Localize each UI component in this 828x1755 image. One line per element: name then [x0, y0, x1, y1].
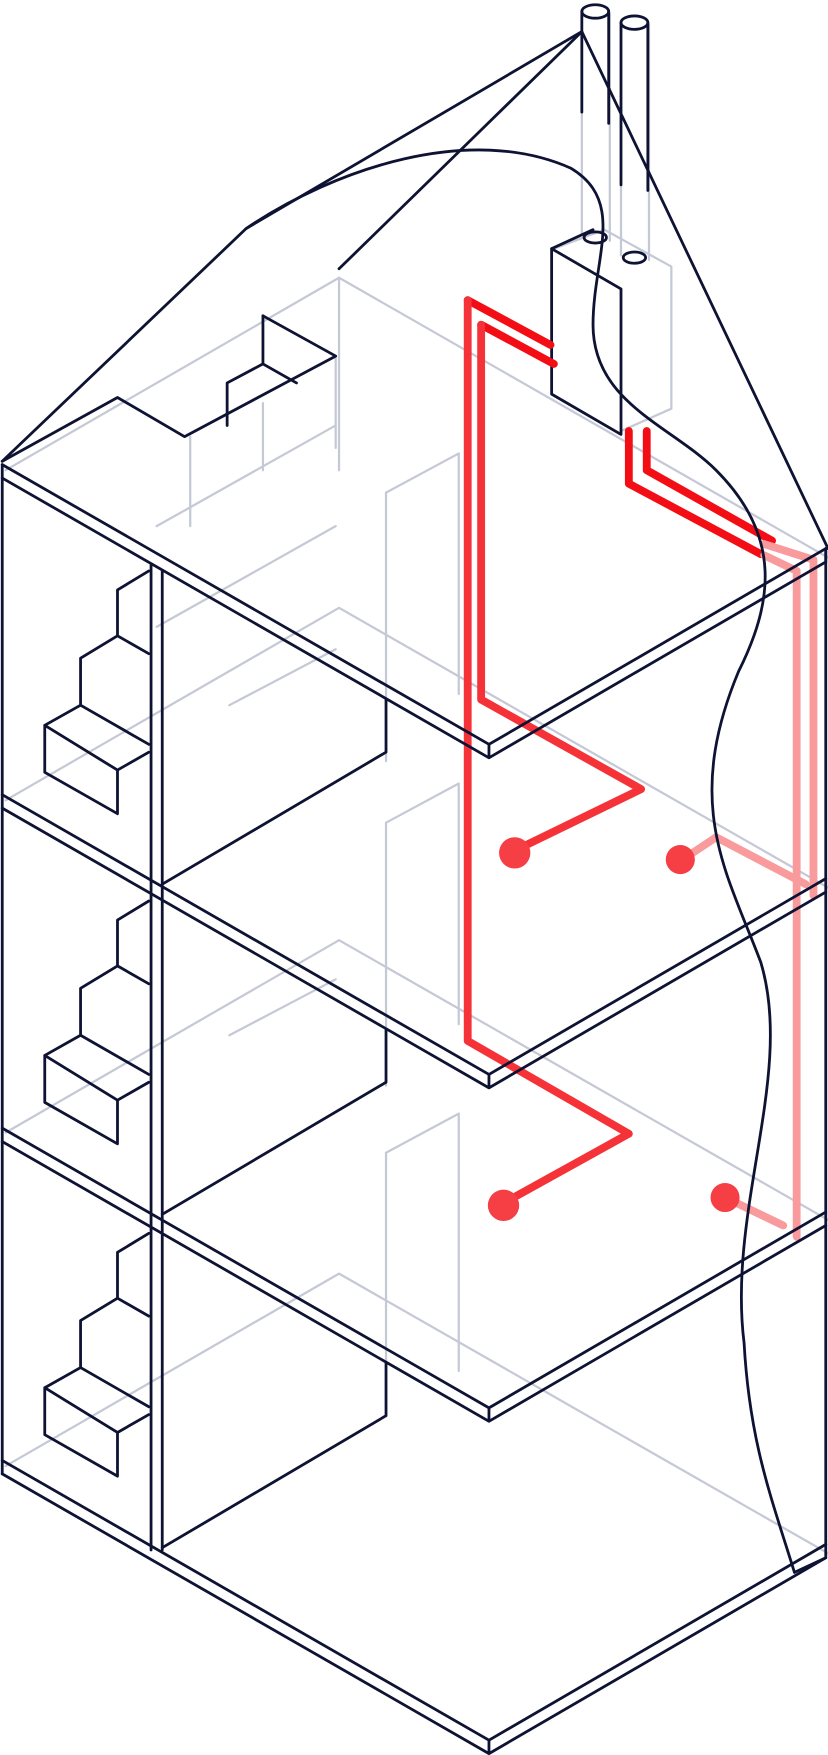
- floors and walls: [2, 465, 826, 1754]
- chimney pipes: [582, 14, 649, 260]
- water heater box: [552, 230, 621, 434]
- faint back structure: [6, 230, 828, 1553]
- section cut curve: [246, 150, 794, 1572]
- red pipes: [468, 300, 772, 554]
- roof: [2, 32, 828, 549]
- stairs: [45, 571, 149, 1476]
